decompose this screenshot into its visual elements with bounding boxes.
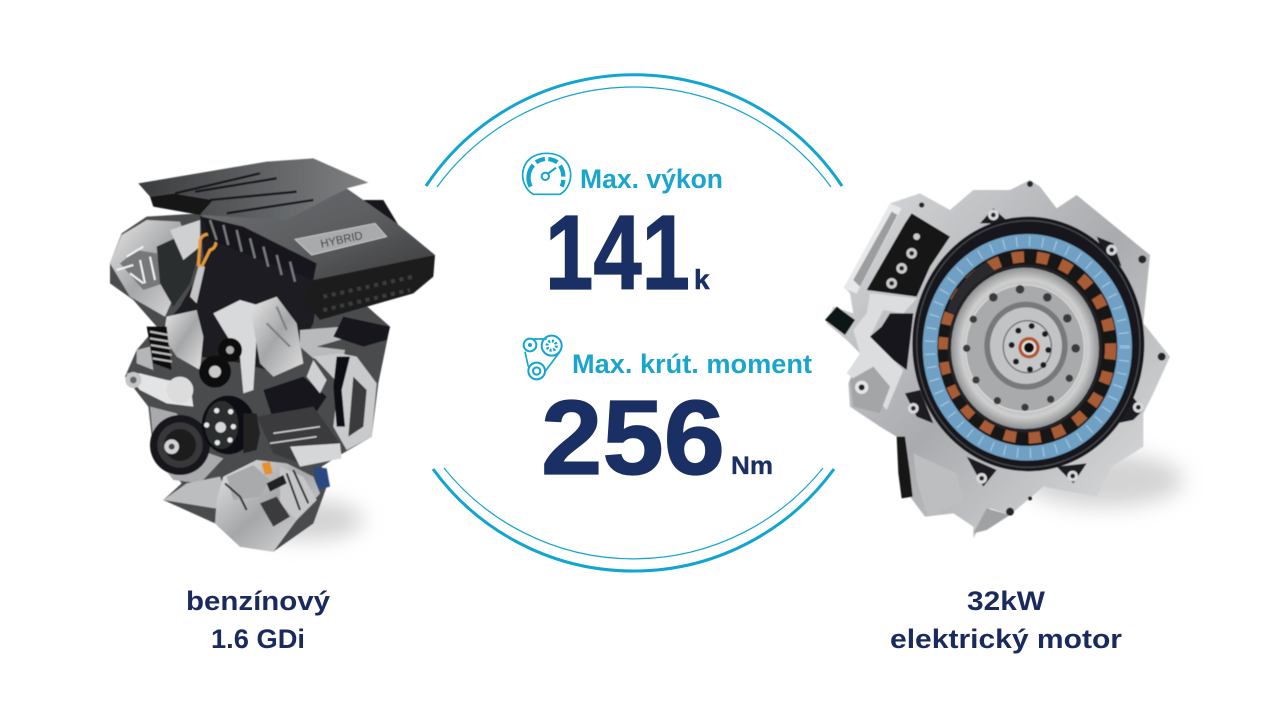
label: gasoline engine — [186, 586, 330, 654]
label: electric motor — [890, 586, 1123, 654]
gasoline engine illustration: HYBRID — [320, 230, 364, 251]
value: 141 k: 141 — [545, 194, 690, 312]
heading: max torque: Max. krút. moment — [572, 349, 812, 379]
icon: belt pulleys — [524, 336, 562, 379]
value: 141 k: k — [694, 264, 710, 295]
label: electric motor: elektrický motor — [890, 624, 1123, 654]
gasoline engine illustration — [110, 158, 435, 552]
electric motor illustration — [825, 180, 1183, 538]
value: 256 Nm: 256 — [541, 379, 725, 497]
label: gasoline engine: 1.6 GDi — [211, 624, 305, 654]
value: 256 Nm: Nm — [731, 452, 773, 480]
label: electric motor: 32kW — [967, 586, 1046, 616]
label: gasoline engine: benzínový — [186, 586, 330, 616]
heading: max power: Max. výkon — [580, 164, 723, 194]
icon: speedometer — [523, 153, 571, 194]
icon: central circle arcs — [426, 75, 842, 571]
